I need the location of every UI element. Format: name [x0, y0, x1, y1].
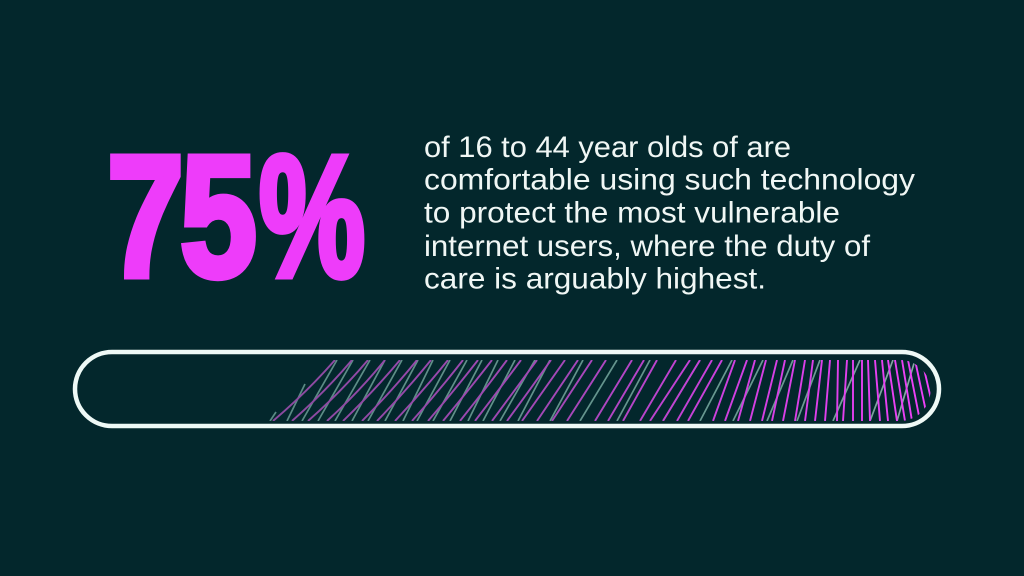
- big percentage: [107, 120, 365, 314]
- bar fill hatching: [270, 360, 944, 421]
- big percentage: 7: [107, 120, 184, 314]
- grey hatch lines: [270, 360, 915, 421]
- description text: care is arguably highest.: [424, 262, 766, 296]
- big percentage: %: [259, 120, 365, 313]
- big percentage: 5: [180, 120, 257, 314]
- progress bar: [75, 352, 944, 426]
- bar outline: [75, 352, 939, 426]
- purple hatch lines: [273, 360, 944, 421]
- description text: to protect the most vulnerable: [424, 196, 840, 230]
- description text: comfortable using such technology: [424, 164, 915, 196]
- description text: [424, 131, 915, 296]
- description text: of 16 to 44 year olds of are: [424, 131, 791, 164]
- description text: internet users, where the duty of: [424, 230, 871, 263]
